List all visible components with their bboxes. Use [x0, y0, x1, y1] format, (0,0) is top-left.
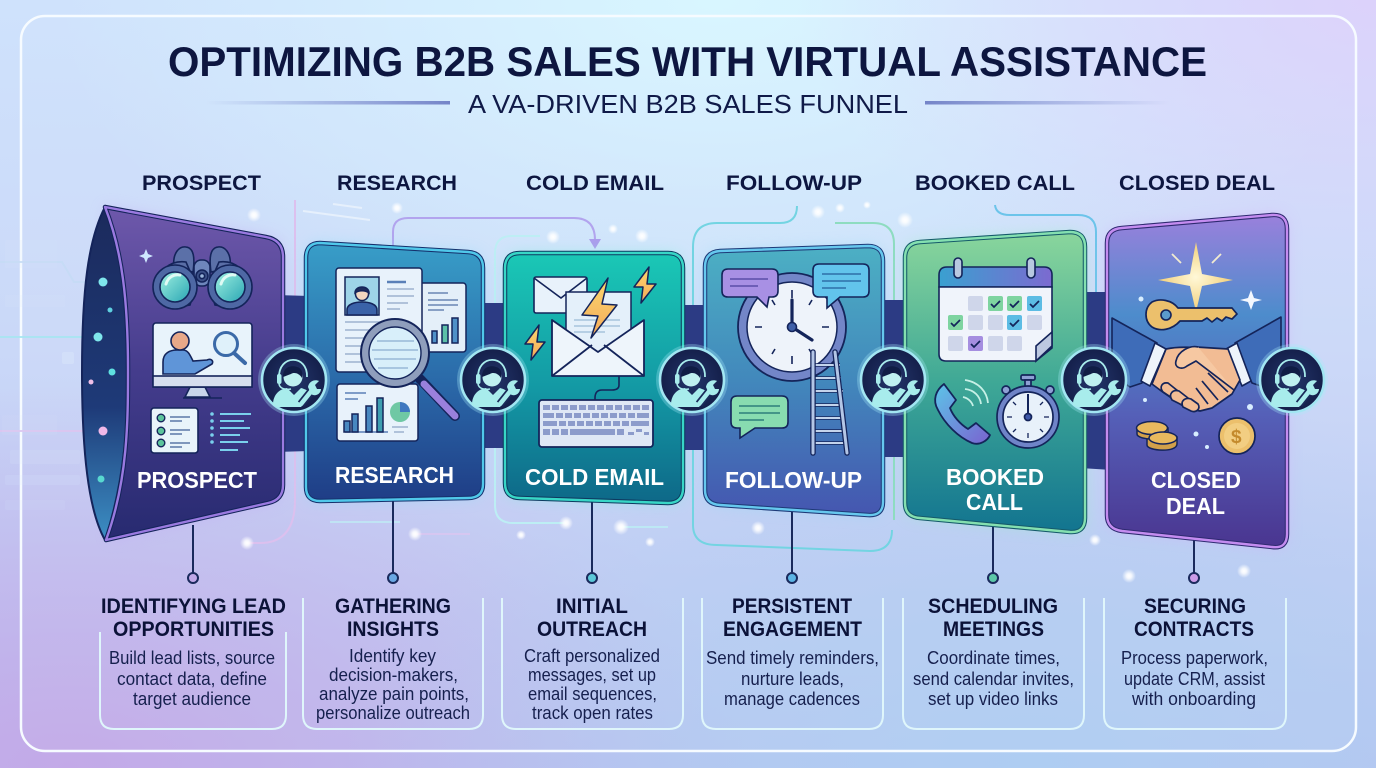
- icon: sleeves: [1112, 317, 1281, 387]
- vertical stems and node dots: [188, 498, 1199, 583]
- panel: securing contracts: [1104, 595, 1286, 729]
- card glows: [105, 207, 1287, 547]
- panel: initial outreach: [502, 595, 683, 729]
- stage labels row: [142, 172, 1275, 195]
- stage labels row: FOLLOW-UP: [726, 172, 862, 195]
- card label: research: RESEARCH: [335, 462, 454, 488]
- icon: profile document: [336, 268, 422, 372]
- icon: chart sheet: [337, 384, 418, 441]
- panel: initial outreach: INITIAL: [556, 595, 628, 618]
- stage labels row: CLOSED DEAL: [1119, 172, 1275, 195]
- panel: initial outreach: OUTREACH: [537, 618, 647, 641]
- icon: blue speech bubble: [813, 264, 869, 308]
- icon: shining star: [1158, 242, 1262, 312]
- panel: persistent engagement: PERSISTENT: [732, 595, 852, 618]
- panel: initial outreach: Craft personalized: [524, 646, 660, 666]
- panel: securing contracts: Process paperwork,: [1121, 648, 1268, 668]
- panel: persistent engagement: nurture leads,: [741, 669, 844, 689]
- subtitle with rules: A VA-DRIVEN B2B SALES FUNNEL: [468, 89, 908, 119]
- icon: coin stack: [1136, 422, 1177, 450]
- panel: initial outreach: messages, set up: [528, 665, 656, 685]
- icon: binoculars: [153, 247, 252, 309]
- card: follow-up: [705, 246, 883, 515]
- card: closed deal: [1107, 215, 1287, 547]
- card: research: [306, 243, 483, 501]
- icon: telephone handset: [935, 380, 990, 444]
- panel: scheduling meetings: [903, 595, 1084, 729]
- icon: stopwatch: [997, 375, 1059, 448]
- panel: persistent engagement: manage cadences: [724, 689, 860, 709]
- sparkles: [139, 249, 153, 263]
- panel: securing contracts: update CRM, assist: [1124, 669, 1265, 689]
- icon: green speech bubble: [731, 396, 788, 438]
- panel: gathering insights: decision-makers,: [329, 665, 458, 685]
- card: booked call: [905, 232, 1085, 532]
- card label: closed deal: DEAL: [1166, 493, 1225, 519]
- card label: closed deal: [1151, 467, 1241, 519]
- stage labels row: COLD EMAIL: [526, 172, 664, 195]
- stage labels row: BOOKED CALL: [915, 172, 1075, 195]
- card label: cold email: COLD EMAIL: [525, 464, 664, 490]
- panel: identifying lead opportunities: target audience: [133, 689, 251, 709]
- panel: scheduling meetings: send calendar invites,: [913, 669, 1074, 689]
- icon: checklist: [151, 408, 251, 453]
- card label: booked call: BOOKED: [946, 464, 1044, 490]
- icon: VA badge 3: [656, 344, 728, 416]
- panel: persistent engagement: [702, 595, 883, 729]
- icon: VA badge 2: [457, 344, 529, 416]
- icon: golden key: [1146, 300, 1237, 330]
- icon: ladder: [813, 352, 847, 453]
- icon: back envelope: [534, 277, 587, 313]
- left data streams: [0, 240, 103, 510]
- card label: booked call: CALL: [966, 489, 1023, 515]
- panel: persistent engagement: ENGAGEMENT: [723, 618, 862, 641]
- panel: scheduling meetings: Coordinate times,: [927, 648, 1060, 668]
- icon: dollar coin: $: [1231, 427, 1242, 448]
- panel: scheduling meetings: set up video links: [928, 689, 1058, 709]
- stage labels row: RESEARCH: [337, 172, 457, 195]
- connector lines: [247, 200, 1096, 551]
- icon: dollar coin: [1219, 418, 1255, 454]
- panel: identifying lead opportunities: [100, 595, 286, 729]
- stage labels row: PROSPECT: [142, 172, 261, 195]
- panel: initial outreach: email sequences,: [528, 684, 657, 704]
- icon: purple speech bubble: [722, 269, 778, 307]
- icon: calendar: [939, 258, 1052, 361]
- funnel panel: [105, 207, 283, 540]
- purple arrow research to cold email: [393, 218, 601, 249]
- card: prospect funnel: [82, 207, 283, 540]
- icon: VA badge 1: [258, 344, 330, 416]
- panel: gathering insights: GATHERING: [335, 595, 451, 618]
- glow dots: [240, 201, 1251, 583]
- panel: gathering insights: [303, 595, 483, 729]
- central navy band: [275, 292, 1112, 470]
- icon: letter: [566, 292, 631, 352]
- card label: follow-up: FOLLOW-UP: [725, 467, 862, 493]
- card label: booked call: [946, 464, 1044, 515]
- panel: gathering insights: analyze pain points,: [319, 684, 469, 704]
- panel: persistent engagement: Send timely reminders,: [706, 648, 879, 668]
- panel: identifying lead opportunities: OPPORTUNITIES: [113, 618, 274, 641]
- icon: monitor with person and magnifier: [153, 323, 252, 398]
- icon: open envelope: [552, 320, 644, 376]
- panel: identifying lead opportunities: contact data, define: [117, 669, 267, 689]
- icon: handshake: [1152, 347, 1240, 412]
- panel: securing contracts: CONTRACTS: [1134, 618, 1254, 641]
- panel: initial outreach: track open rates: [532, 703, 653, 723]
- panel: gathering insights: personalize outreach: [316, 703, 470, 723]
- icon: lightning bolts: [525, 267, 656, 360]
- icon: clock: [738, 273, 846, 381]
- card label: closed deal: CLOSED: [1151, 467, 1241, 493]
- panel: gathering insights: INSIGHTS: [347, 618, 439, 641]
- mouth nodes: [88, 278, 116, 482]
- icon: magnifying glass: [360, 318, 455, 416]
- title: OPTIMIZING B2B SALES WITH VIRTUAL ASSISTANCE: [168, 38, 1207, 85]
- icon: VA badge 6: [1256, 344, 1328, 416]
- icon: keyboard: [539, 376, 653, 447]
- sparkles: [1138, 296, 1253, 449]
- panel: scheduling meetings: SCHEDULING: [928, 595, 1058, 618]
- icon: VA badge 5: [1058, 344, 1130, 416]
- icon: VA badge 4: [857, 344, 929, 416]
- panel: gathering insights: Identify key: [349, 646, 436, 666]
- card label: prospect: PROSPECT: [137, 467, 257, 493]
- panel: identifying lead opportunities: Build lead lists, source: [109, 648, 275, 668]
- panel: identifying lead opportunities: IDENTIFYING LEAD: [101, 595, 286, 618]
- card: cold email: [505, 253, 683, 503]
- funnel mouth: [82, 207, 128, 540]
- panel: securing contracts: SECURING: [1144, 595, 1246, 618]
- panel: securing contracts: with onboarding: [1131, 689, 1256, 709]
- subtitle with rules: [205, 89, 1170, 119]
- icon: data sheet with bars: [418, 283, 466, 352]
- panel: scheduling meetings: MEETINGS: [943, 618, 1044, 641]
